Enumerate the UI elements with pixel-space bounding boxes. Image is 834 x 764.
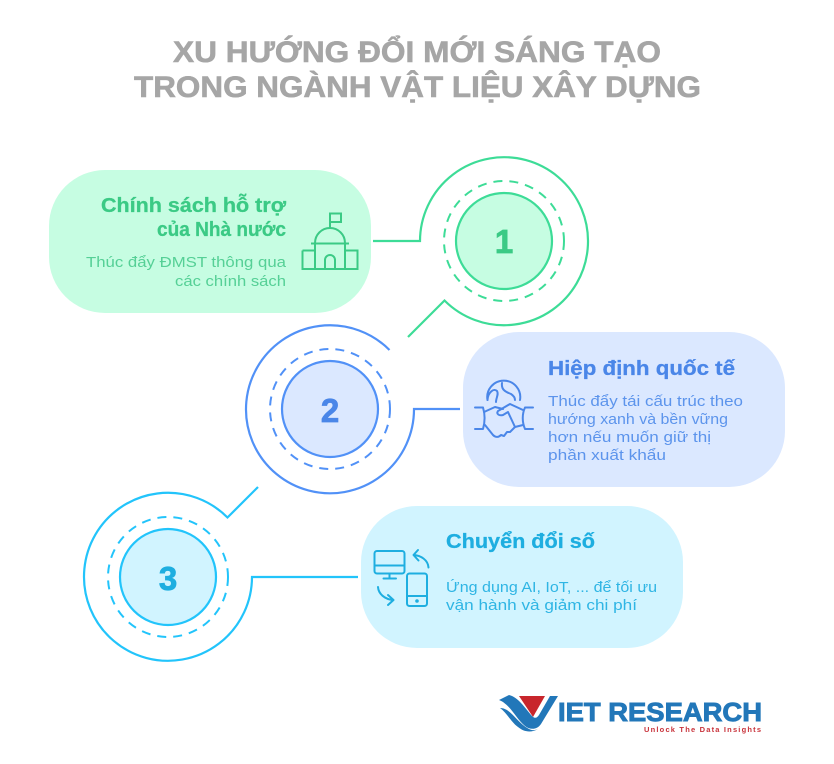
step 2 circle [246,325,460,493]
title [134,35,701,104]
heading [101,193,287,241]
inner disc [120,529,216,625]
title: TRONG NGÀNH VẬT LIỆU XÂY DỰNG [134,70,701,104]
panel: international agreements [463,332,785,487]
card background [361,506,683,648]
description: Thúc đẩy tái cấu trúc theo [548,393,743,410]
number 2: 2 [321,392,339,429]
card background [463,332,785,487]
step 1 circle [373,157,588,337]
card background [49,170,371,313]
dashed ring [270,349,390,469]
outer ring with connector [246,325,460,493]
number 3: 3 [159,560,177,597]
wordmark: IET RESEARCH [558,697,762,727]
panel: digital transformation [361,506,683,648]
description [86,254,287,290]
logo: Viet Research [499,695,762,734]
heading: Chính sách hỗ trợ [101,193,287,217]
description [446,579,657,614]
outer ring with connectors [84,487,358,661]
description: vận hành và giảm chi phí [446,597,638,614]
logo mark [499,695,558,731]
tagline: Unlock The Data Insights [644,725,761,734]
description: Ứng dụng AI, IoT, ... để tối ưu [446,579,657,596]
number 1: 1 [495,223,513,260]
step 3 circle [84,487,358,661]
description: các chính sách [175,273,286,290]
dashed ring [108,517,228,637]
inner disc [282,361,378,457]
panel: government policy [49,170,371,313]
description [548,393,743,464]
description: phần xuất khẩu [548,447,666,464]
description: Thúc đẩy ĐMST thông qua [86,254,287,271]
icon: handshake and globe [475,381,533,437]
outer ring with connectors [373,157,588,337]
heading: của Nhà nước [157,219,286,241]
description: hướng xanh và bền vững [548,411,728,428]
icon: government building [302,214,358,269]
dashed ring [444,181,564,301]
icon: devices sync [374,550,428,606]
heading: Hiệp định quốc tế [548,358,736,380]
heading: Chuyển đổi số [446,531,595,553]
title: XU HƯỚNG ĐỔI MỚI SÁNG TẠO [173,35,661,69]
inner disc [456,193,552,289]
description: hơn nếu muốn giữ thị [548,429,711,446]
